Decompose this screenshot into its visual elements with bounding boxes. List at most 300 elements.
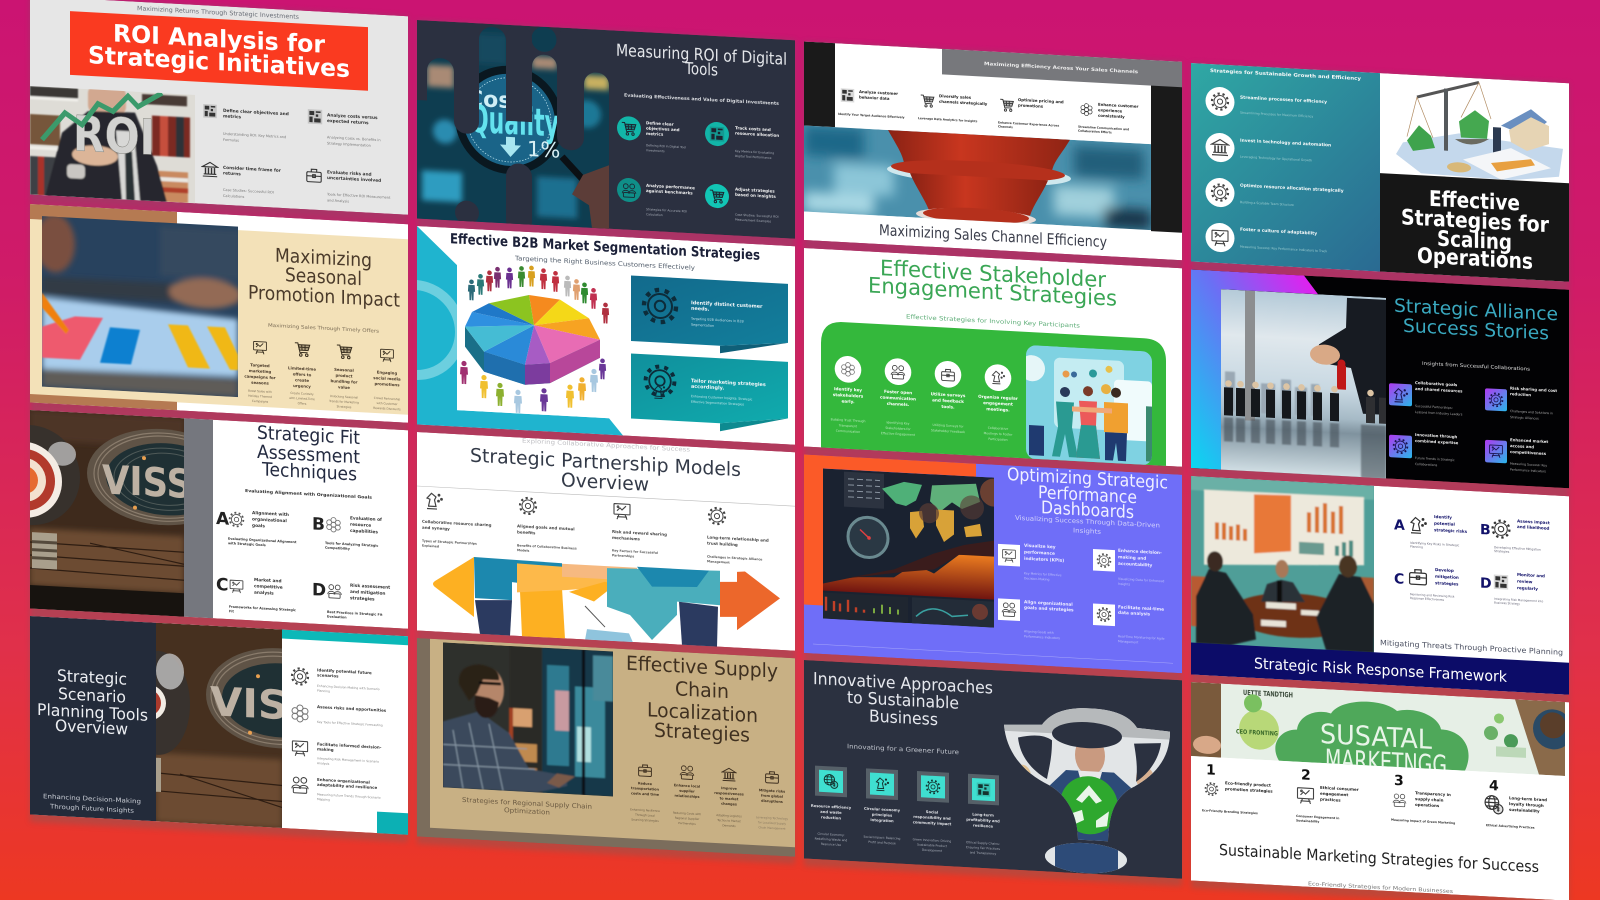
item: responsiveness: Tactics to Market <box>716 818 742 823</box>
photo: green marketing poster: SUSATAL <box>1320 719 1432 756</box>
item: social media <box>373 349 401 411</box>
title: Strategic Partnership Models <box>470 445 741 481</box>
panel: Sustainable Business slide <box>804 660 1182 880</box>
title: Dashboards <box>1041 498 1134 523</box>
grey header band <box>942 49 1182 87</box>
photo: bulb and VIS sign: VIS <box>210 679 288 729</box>
panel: Risk Response slide <box>1191 476 1569 695</box>
title <box>868 255 1117 312</box>
photo: red funnel <box>804 126 1151 234</box>
item: meetings: Meetings to Foster <box>984 431 1013 437</box>
item: customer experience: experience <box>1098 107 1123 114</box>
item: global disruptions: Chain Management <box>758 825 787 831</box>
item: communication channels: communication <box>880 395 916 401</box>
item D: review <box>1517 579 1533 584</box>
title: Business <box>869 706 938 729</box>
item 2: Ethical consumer <box>1320 785 1359 792</box>
item: future scenarios: Identify potential future <box>317 667 372 675</box>
item: responsiveness <box>714 768 744 828</box>
item: resource sharing <box>422 493 492 551</box>
title <box>1007 465 1168 525</box>
item: profitability: resilience <box>973 824 994 829</box>
item: adaptability: adaptability and resilience <box>317 782 377 790</box>
item: limited-time offers: offers to <box>293 371 312 377</box>
item: customer experience: Streamline Communication and <box>1078 125 1129 131</box>
item A: A <box>1394 517 1405 534</box>
item: profitability: Long-term <box>972 813 994 818</box>
grey header band: Maximizing Efficiency Across Your Sales Channels <box>984 61 1138 75</box>
item: product bundling: product <box>335 373 353 379</box>
callout: identify needs: needs. <box>691 306 710 313</box>
item: responsiveness: Adapting Logistics <box>716 813 742 818</box>
item A: Alignment with <box>252 510 289 518</box>
item: transportation: costs and time <box>631 791 660 797</box>
photo caption: Strategies for Regional Supply Chain <box>462 796 592 811</box>
item: adaptability <box>291 776 380 802</box>
item: circular economy <box>864 768 901 846</box>
item: analyze costs <box>308 109 381 148</box>
photo: man holding ROI letters: ROI <box>73 104 155 167</box>
item: resource allocation: Optimize resource allocation strategically <box>1240 183 1344 194</box>
subtitle: Visualizing Success Through Data-Driven <box>1015 514 1160 530</box>
subtitle: Insights from Successful Collaborations <box>1422 361 1530 373</box>
item: innovation: Collaborations <box>1415 462 1438 467</box>
item A: goals <box>252 523 265 529</box>
item: risk sharing: Risk sharing and cost <box>1510 386 1557 393</box>
title: Maximizing <box>275 245 372 272</box>
title: Effective B2B Market Segmentation Strategies <box>450 231 760 264</box>
callout: tailor marketing: accordingly. <box>691 384 724 392</box>
item: identify stakeholders: Transparent <box>838 423 858 428</box>
item: shared resources: Successful Partnerships: <box>1415 404 1453 410</box>
item: campaigns: Boost Sales with <box>248 389 272 394</box>
item: global disruptions: Leveraging Technology <box>756 815 788 821</box>
item: long-term relationship: trust building <box>707 541 738 547</box>
overlay: rounded dark bars <box>454 22 584 237</box>
item: identify stakeholders: Building Trust Through <box>831 417 865 423</box>
item: evaluate risks: Tools for Effective ROI Measurement <box>326 192 391 200</box>
item: align goals: Performance Indicators <box>1024 634 1060 640</box>
item: KPIs: Key Metrics for Effective <box>1024 571 1062 577</box>
title: Promotion Impact <box>248 282 400 312</box>
item: long-term relationship: Management <box>707 559 730 565</box>
item B: Strategies <box>1494 549 1510 554</box>
item: product bundling <box>328 345 359 410</box>
item D <box>1480 570 1545 607</box>
item 4: loyalty through <box>1509 801 1544 808</box>
item: social responsibility: Green Innovation: Driving <box>913 837 951 843</box>
panel: Performance Dashboards slide <box>804 454 1182 673</box>
callout: identify needs: Identify distinct customer <box>691 300 763 310</box>
item B: capabilities <box>350 528 378 535</box>
item B: B <box>1480 522 1491 539</box>
photo: magnifier with cost quality <box>417 20 609 229</box>
item: surveys: Stakeholder Feedback <box>931 428 965 434</box>
item: campaigns: marketing <box>249 368 271 374</box>
item: aligned goals: Aligned goals and mutual <box>517 523 575 531</box>
item: define objectives <box>617 116 686 154</box>
item: real-time analysis: Real-Time Monitoring for Agile <box>1118 634 1165 641</box>
item: long-term relationship <box>707 508 769 567</box>
photo: bulb and VISS sign <box>30 410 184 617</box>
gradient corner <box>1191 270 1318 475</box>
item: aligned goals: Models <box>517 548 530 553</box>
item: define objectives: metrics <box>646 131 664 137</box>
item: pricing: Channels <box>998 124 1013 129</box>
item: meetings: engagement <box>983 400 1013 407</box>
illustration: team handshake <box>1019 345 1154 466</box>
item: communication channels: Identifying Key <box>886 420 910 426</box>
illustration: scale with house and phone <box>1396 78 1563 183</box>
item: diversify channels: channels strategically <box>939 99 988 106</box>
photo: dark dashboard <box>823 469 1008 628</box>
item: risk sharing: Challenges and Solutions in <box>1510 409 1553 415</box>
item: streamline: Streamline processes for efficiency <box>1240 95 1327 105</box>
item C: strategies <box>1435 580 1459 587</box>
photo: bulb and VISS sign: VISS <box>102 457 192 508</box>
item C: competitive <box>254 583 283 591</box>
bottom band with title: Strategic Risk Response Framework <box>1254 654 1507 686</box>
item 3 <box>1391 773 1455 825</box>
item: analyze costs: Analyze costs versus <box>327 112 378 121</box>
item B: Developing Effective Mitigation <box>1494 545 1541 552</box>
item A <box>216 511 296 546</box>
callout: identify needs: Targeting B2B Audiences in B2B <box>690 317 744 324</box>
title: Engagement Strategies <box>868 273 1117 312</box>
item: innovation: Future Trends in Strategic <box>1415 456 1455 462</box>
subtitle: Mitigating Threats Through Proactive Planning <box>1380 638 1563 657</box>
item: accountability: Enhance decision- <box>1118 548 1162 556</box>
callout: tailor marketing: Effective Segmentation Strategies <box>691 400 744 407</box>
item: risk sharing: reduction <box>1510 391 1531 397</box>
title: Success Stories <box>1403 316 1549 345</box>
item: decision-making: Facilitate informed decision- <box>317 741 382 750</box>
title on black: Scaling <box>1437 227 1512 256</box>
subtitle: Evaluating Effectiveness and Value of Digital Investments <box>624 93 779 107</box>
panel: Sales Channel slide <box>804 42 1182 260</box>
item D: Integrating Risk Management into <box>1494 597 1544 603</box>
item D: D <box>312 580 326 601</box>
item: resource efficiency: reduction <box>821 815 841 820</box>
item: campaigns: Campaigns <box>252 399 269 404</box>
item: real-time analysis: Facilitate real-time <box>1118 604 1164 613</box>
item 2: Sustainability <box>1296 818 1319 824</box>
teal left shape <box>370 223 623 436</box>
item: behaviour data <box>838 88 905 119</box>
item: profitability: Ethical Supply Chains: <box>966 840 1000 846</box>
item: define objectives: Formulas <box>223 138 239 143</box>
item: product bundling: Strategies <box>337 404 352 409</box>
item: future scenarios: Planning <box>317 689 330 693</box>
title: Techniques <box>261 459 357 485</box>
item: responsiveness: to market <box>720 796 739 801</box>
item: communication channels: channels. <box>887 401 910 407</box>
item: identify stakeholders: early. <box>841 399 855 404</box>
title: Sustainable Marketing Strategies for Success <box>1219 841 1539 876</box>
item: transportation: transportation <box>631 786 660 792</box>
title: Maximizing Sales Channel Efficiency <box>879 221 1107 251</box>
item D: Evaluation <box>327 614 347 620</box>
title: Strategic Alliance <box>1394 296 1558 325</box>
item: adjust strategies: Adjust strategies <box>735 187 775 194</box>
item: pricing: Optimize pricing and <box>1018 97 1064 104</box>
item: analyze costs: Strategy Implementation <box>327 141 371 148</box>
item: resource sharing: Types of Strategic Partnerships <box>422 539 477 546</box>
photo in trophy shape <box>999 698 1179 880</box>
subtitle: Targeting the Right Business Customers Effectively <box>514 255 695 272</box>
item: pricing <box>998 96 1064 132</box>
title: Assessment <box>257 442 360 468</box>
item 3: 3 <box>1394 773 1404 789</box>
item: limited-time offers: Offers <box>298 401 307 406</box>
item A: strategic risks <box>1434 527 1468 534</box>
item: campaigns: Holiday Themed <box>248 394 272 399</box>
item 4: sustainability <box>1509 807 1540 814</box>
photo: magnifier with cost quality: 1% <box>527 136 560 163</box>
item: market access: Enhanced market <box>1510 437 1548 444</box>
item: accountability: Insights <box>1118 582 1130 586</box>
item: shared resources: and shared resources <box>1415 386 1463 394</box>
item: risks and opportunities <box>292 703 387 728</box>
title on black: Operations <box>1417 244 1533 275</box>
item: decision-making <box>292 740 382 766</box>
item: market access: Performance Indicators <box>1510 468 1546 474</box>
panel: Partnership Models slide <box>417 432 795 651</box>
item A: organizational <box>252 516 287 524</box>
item: benchmarks: against benchmarks <box>646 188 693 196</box>
item: campaigns <box>244 341 276 404</box>
item: adaptability: Mapping <box>317 797 330 802</box>
item D <box>314 582 390 618</box>
item D: D <box>1480 575 1492 592</box>
item: accountability: accountability <box>1118 561 1153 569</box>
item: track costs: resource allocation <box>735 131 779 138</box>
item: define objectives: Define clear objectives and <box>223 108 289 117</box>
item: campaigns: campaigns for <box>244 374 276 380</box>
item C: Monitoring and Reviewing Risk <box>1410 592 1455 599</box>
item: product bundling: bundling for <box>331 378 358 385</box>
title <box>1394 296 1558 345</box>
item: meetings: meetings. <box>986 406 1010 413</box>
item: adjust strategies <box>705 183 779 224</box>
photo: green marketing poster <box>1191 682 1573 788</box>
callout: identify needs <box>631 275 788 357</box>
item: KPIs: indicators (KPIs) <box>1024 556 1064 564</box>
left title panel: Through Future Insights <box>49 803 134 815</box>
item 3: Transparency in <box>1415 790 1451 797</box>
item: adaptability: Measuring Future Trends through Scenario <box>317 792 381 800</box>
item B: Compatibility <box>325 546 351 551</box>
item: resource efficiency: Circular Economy: <box>817 832 845 837</box>
item: transportation: Through Local <box>634 813 655 818</box>
item: resource sharing: Collaborative resource sharing <box>422 519 492 527</box>
item B: resource <box>350 522 371 529</box>
item: global disruptions: for Localized Supply <box>758 820 786 826</box>
item 4 <box>1485 778 1547 830</box>
item: circular economy: principles <box>872 813 893 818</box>
item: track costs: Key Metrics for Evaluating <box>735 149 774 155</box>
item: resource sharing: and synergy <box>422 525 450 531</box>
item 2: 2 <box>1301 767 1311 784</box>
item: customer experience: Enhance customer <box>1098 102 1138 109</box>
title: Strategic Fit <box>257 423 360 449</box>
photo: hand with chart <box>35 213 241 397</box>
item: global disruptions: Mitigate risks <box>759 788 785 794</box>
item: define objectives: Define clear <box>646 120 674 127</box>
item: analyze costs: expected returns <box>327 118 369 126</box>
left title panel: Strategic <box>57 666 127 689</box>
item B: B <box>312 514 325 535</box>
item: meetings: Collaborative <box>988 426 1008 431</box>
item: long-term relationship: Long-term relationship and <box>707 535 769 543</box>
left title panel <box>30 616 156 821</box>
panel: Digital Tools ROI slide <box>417 20 795 248</box>
title on black: Effective <box>1429 187 1520 217</box>
item: benchmarks: Calculation <box>646 212 663 217</box>
callout: tailor marketing: Enhancing Customer Insights: Strategic <box>691 394 753 401</box>
item: limited-time offers <box>288 342 316 406</box>
item: social responsibility <box>913 771 951 853</box>
item: product bundling: Unlocking Seasonal <box>330 394 358 400</box>
item: global disruptions: disruptions <box>761 799 783 804</box>
item: supplier relationships: Partnerships <box>678 821 696 826</box>
item: surveys: and feedback <box>932 397 964 404</box>
item 4: Long-term brand <box>1509 795 1547 802</box>
panel: Stakeholder Engagement slide <box>804 248 1182 478</box>
item A: with Strategic Goals <box>228 541 266 547</box>
item: future scenarios <box>290 667 380 693</box>
item A: Identifying Key Risks in Strategic <box>1410 541 1460 547</box>
item: meetings: Organize regular <box>978 394 1019 401</box>
item A: Identify <box>1434 514 1452 520</box>
photo: man holding ROI letters <box>30 82 195 205</box>
item: resource efficiency: and waste <box>820 810 842 815</box>
item 1: 1 <box>1206 762 1216 779</box>
item: future scenarios: Enhancing Decision-Making with Scenario <box>317 684 380 691</box>
callout: identify needs: Segmentation <box>691 323 714 328</box>
callout: tailor marketing: Tailor marketing strategies <box>691 378 766 388</box>
photo caption: Optimization <box>504 806 550 817</box>
illustration: handshake with arrows <box>433 555 780 650</box>
item: diversify channels <box>918 92 988 124</box>
item: customer experience: Collaboration Efforts <box>1078 129 1112 134</box>
item B <box>1480 516 1550 556</box>
item: surveys: Utilizing Surveys for <box>932 423 964 429</box>
item: benchmarks: Strategies for Accurate ROI <box>646 207 687 213</box>
item: adjust strategies: based on insights <box>735 192 776 199</box>
photo: magnifier with cost quality: Quality <box>470 97 559 146</box>
item B: Tools for Analyzing Strategic <box>325 541 378 548</box>
item: KPIs: performance <box>1024 549 1055 557</box>
panel: Supply Chain slide <box>417 638 795 857</box>
item: future scenarios: scenarios <box>317 672 339 679</box>
item: adaptability <box>1206 222 1327 258</box>
item: customer experience: consistently <box>1098 113 1125 119</box>
item D: Best Practices in Strategic Fit <box>327 610 383 617</box>
subtitle <box>1015 514 1160 539</box>
item B <box>314 516 382 550</box>
item: analyze costs: Analyzing Costs vs. Benefits in <box>327 135 381 142</box>
item: KPIs: Decision-Making <box>1024 576 1049 582</box>
item: risks and opportunities: Key Tools for Effective Strategic Forecasting <box>317 720 383 727</box>
item: benchmarks: Analyze performance <box>646 183 695 190</box>
item: track costs: Digital Tool Performance <box>735 154 772 160</box>
item: meetings: Participation <box>988 437 1008 442</box>
item: global disruptions: from global <box>761 794 783 799</box>
item D: Monitor and <box>1517 572 1545 578</box>
item: transportation: Reduce <box>638 781 653 786</box>
item: accountability <box>1093 546 1164 588</box>
left title panel: Overview <box>55 716 128 739</box>
item: risk and reward <box>612 503 667 560</box>
item C: mitigation <box>1435 574 1459 580</box>
left title panel: Enhancing Decision-Making <box>43 793 141 805</box>
title <box>626 652 778 748</box>
item A: Evaluating Organizational Alignment <box>228 537 297 544</box>
item: KPIs: Visualize key <box>1024 543 1056 550</box>
photo: boardroom meeting <box>1191 476 1374 653</box>
item: circular economy: Circular economy <box>864 807 901 813</box>
item: aligned goals <box>517 497 577 555</box>
item: social media: promotions <box>374 381 400 387</box>
item: product bundling: Seasonal <box>334 367 354 373</box>
item C <box>216 578 296 612</box>
item: define objectives <box>203 104 289 145</box>
item: risk sharing <box>1485 384 1557 422</box>
item: product bundling: Trends for Marketing <box>328 399 359 405</box>
item: social responsibility: Development <box>922 848 943 853</box>
item: innovation <box>1389 431 1459 468</box>
item: technology: Invest in technology and automation <box>1240 138 1331 148</box>
subtitle: Maximizing Returns Through Strategic Investments <box>137 5 299 21</box>
item 3: supply chain <box>1415 796 1444 803</box>
item: transportation <box>630 764 660 823</box>
item: align goals: goals and strategies <box>1024 605 1074 613</box>
item C: Response Effectiveness <box>1410 596 1445 602</box>
item: streamline: Streamlining Processes for Maximum Efficiency <box>1240 111 1313 119</box>
item: evaluate risks: and Analysis <box>327 198 349 204</box>
item A: potential <box>1434 521 1455 527</box>
item: accountability: Visualizing Data for Enhanced <box>1118 577 1164 583</box>
item: supplier relationships: Reducing Costs with <box>673 811 701 816</box>
item: track costs: Track costs and <box>735 125 771 132</box>
subtitle: Effective Strategies for Involving Key Participants <box>906 314 1080 330</box>
panel: Sustainable Marketing slide <box>1191 682 1573 900</box>
subtitle: Insights <box>1073 526 1102 536</box>
item: time frame: Case Studies: Successful ROI <box>223 188 274 195</box>
left teal panel <box>1191 63 1380 272</box>
item: supplier relationships: Enhance local <box>674 783 700 789</box>
item: surveys: Utilize surveys <box>931 391 966 398</box>
item: circular economy: Social Impact: Balancing <box>864 835 901 841</box>
item: decision-making: Integrating Risk Management in Scenario <box>317 756 379 764</box>
item: shared resources: Collaborative goals <box>1415 380 1458 387</box>
item: accountability: making and <box>1118 554 1146 562</box>
item: social media: with Customer <box>376 401 398 406</box>
item: responsiveness: changes <box>721 802 737 807</box>
item: supplier relationships: supplier <box>679 789 695 794</box>
item 1 <box>1202 762 1273 816</box>
item A <box>1394 512 1468 552</box>
panel: Scaling Operations slide <box>1191 63 1569 282</box>
item: shared resources <box>1389 379 1463 417</box>
item: pricing: Enhance Customer Experience Across <box>998 120 1059 128</box>
item: limited-time offers: Limited-time <box>288 365 316 372</box>
item 1: Eco-Friendly Branding Strategies <box>1202 808 1258 815</box>
item: resource allocation <box>1206 177 1344 214</box>
item C: Fit <box>229 609 234 614</box>
item: real-time analysis <box>1093 603 1165 646</box>
